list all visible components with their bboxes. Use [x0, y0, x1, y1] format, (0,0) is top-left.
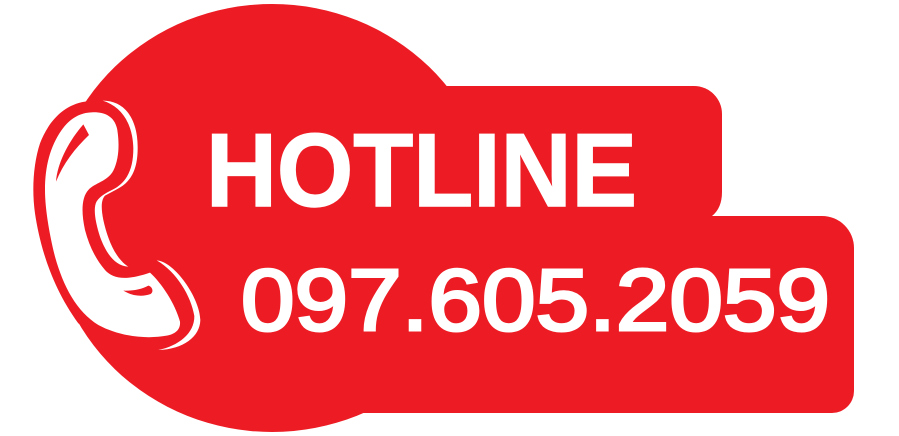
heading: HOTLINE: HOTLINE	[206, 113, 637, 229]
handset upper highlight	[56, 124, 89, 182]
icon: telephone handset	[33, 93, 200, 350]
handset body	[45, 112, 180, 337]
upper white crescent	[95, 101, 138, 267]
handset lower highlight	[123, 286, 152, 296]
phone number: 097.605.2059	[241, 252, 830, 349]
lower white crescent	[157, 260, 200, 350]
handset red outline	[33, 93, 153, 347]
